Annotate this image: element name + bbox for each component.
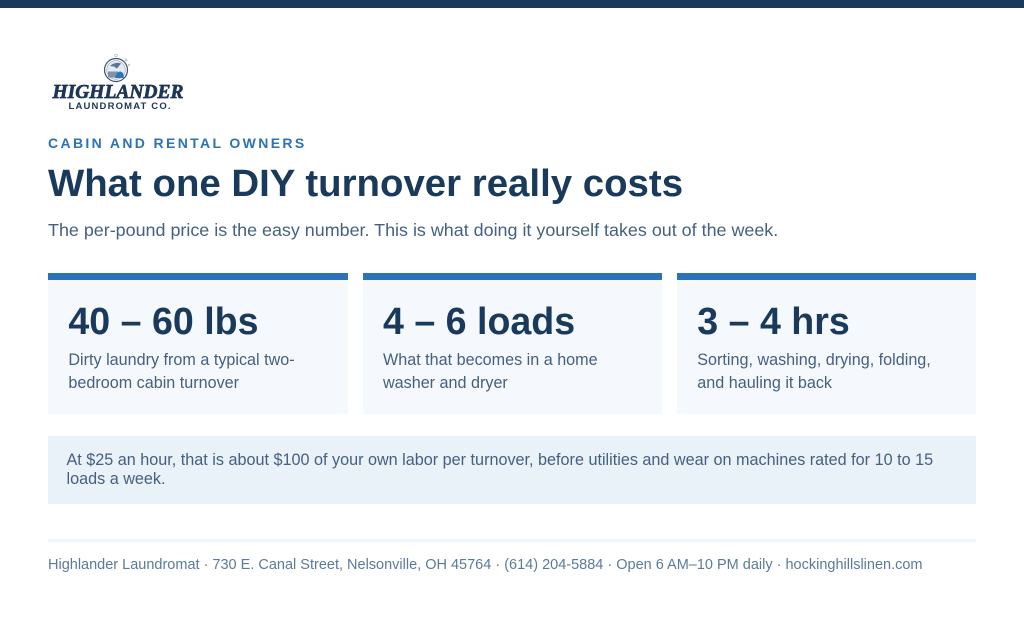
- logo wordmark: HIGHLANDER: [52, 81, 183, 103]
- pounds description: Dirty laundry from a typical two-: [68, 351, 295, 369]
- stat: hours: 3 – 4 hrs: [697, 300, 850, 342]
- panel: pounds stat: [48, 273, 348, 414]
- title: What one DIY turnover really costs: [48, 162, 683, 205]
- loads description: washer and dryer: [383, 374, 508, 392]
- stat: pounds: 40 – 60 lbs: [68, 300, 259, 342]
- stat: loads: 4 – 6 loads: [383, 300, 575, 342]
- icon: laundromat emblem: [104, 54, 130, 82]
- callout: [48, 436, 976, 504]
- subtitle: The per-pound price is the easy number. This is what doing it yourself takes out of the week.: [48, 220, 778, 240]
- hours description: and hauling it back: [697, 374, 832, 392]
- loads description: What that becomes in a home: [383, 351, 598, 369]
- hours description: Sorting, washing, drying, folding,: [697, 351, 931, 369]
- footer contact text: Highlander Laundromat · 730 E. Canal Street, Nelsonville, OH 45764 · (614) 204-5884 · Open 6 AM–10 PM daily · hockinghillslinen.com: [48, 557, 922, 573]
- callout: At $25 an hour, that is about $100 of your own labor per turnover, before utilities and wear on machines rated for 10 to 15 loads a week.: [66, 451, 933, 488]
- eyebrow: CABIN AND RENTAL OWNERS: [48, 135, 307, 151]
- footer: [48, 539, 976, 579]
- logo tagline: LAUNDROMAT CO.: [68, 101, 170, 112]
- hours description: [697, 351, 931, 392]
- loads description: [383, 351, 598, 392]
- logo: Highlander Laundromat Co.: [52, 54, 184, 112]
- pounds description: bedroom cabin turnover: [68, 374, 239, 392]
- panel: hours stat: [677, 273, 976, 414]
- top bar: [0, 0, 1024, 8]
- pounds description: [68, 351, 295, 392]
- panel: loads stat: [363, 273, 662, 414]
